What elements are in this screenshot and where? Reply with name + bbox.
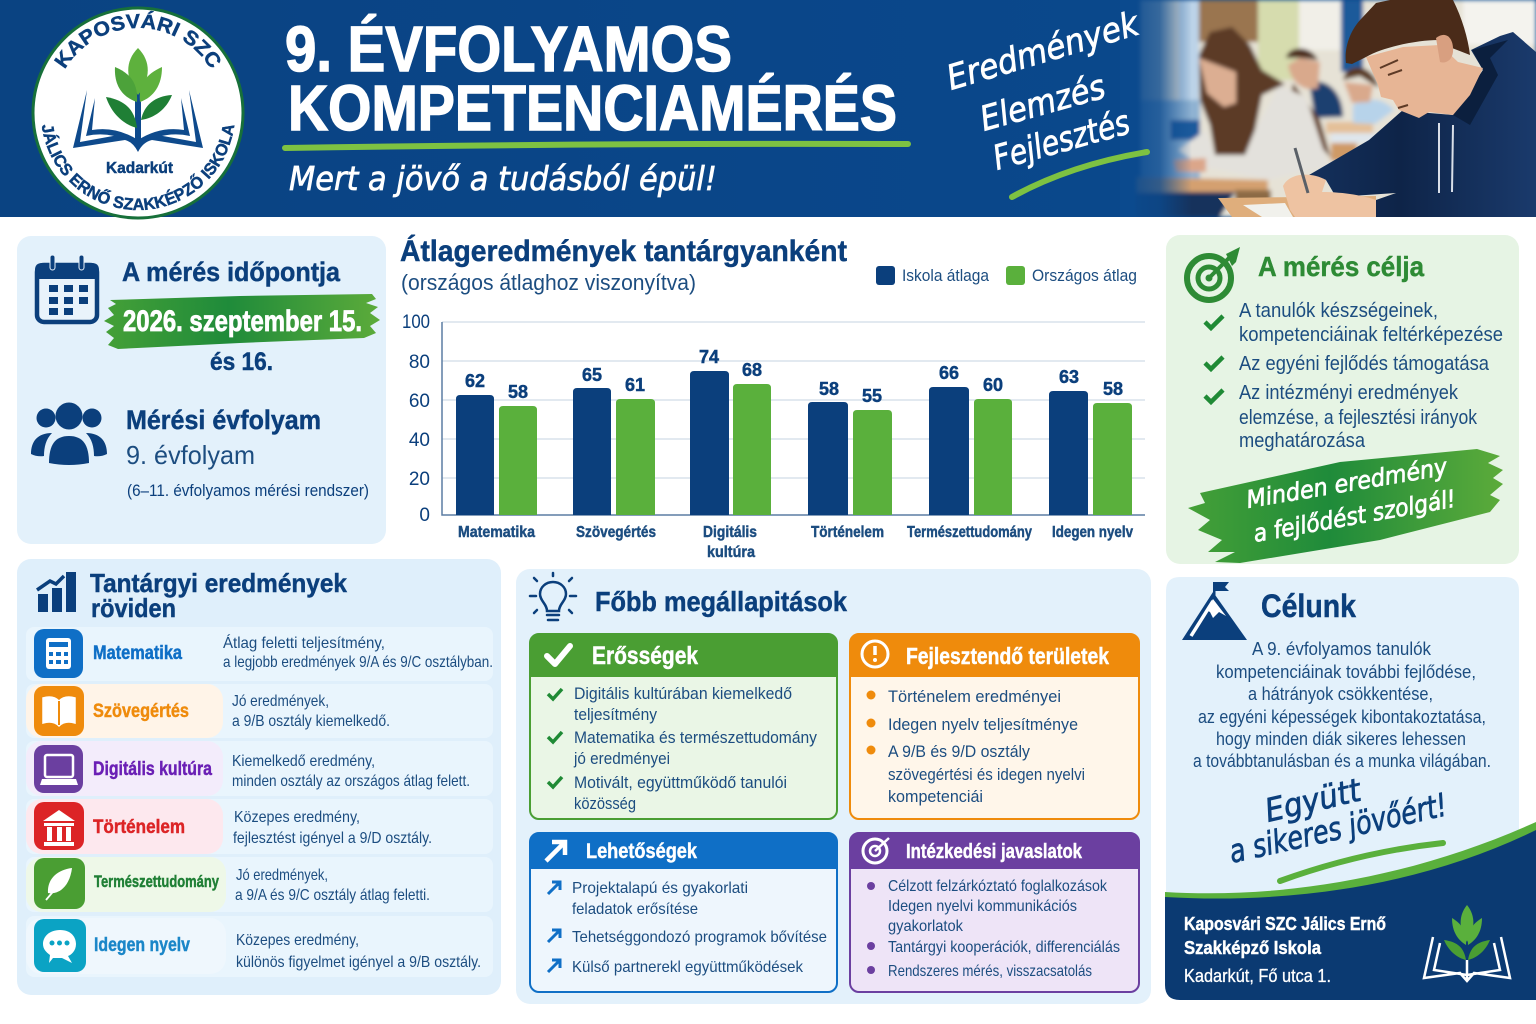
footer: school address: Szakképző Iskola: [1184, 938, 1322, 958]
row: Történelem: fejlesztést igényel a 9/D osztály.: [233, 830, 432, 847]
row: Digitális kultúra: Digitális kultúra: [93, 759, 212, 780]
panel: main findings: [516, 569, 1151, 1004]
row: Természettudomány: a 9/A és 9/C osztály átlag feletti.: [235, 887, 430, 904]
row: Matematika: a legjobb eredmények 9/A és 9/C osztályban.: [223, 654, 493, 671]
icon: bar chart growth: [37, 572, 76, 612]
slogan brush: Minden eredmény: [1244, 453, 1450, 514]
goal text: az egyéni képességek kibontakoztatása,: [1198, 707, 1486, 727]
photo: students writing a test: [1120, 0, 1536, 217]
card: areas to improve: [850, 634, 1139, 819]
card: recommended actions: Intézkedési javaslatok: [906, 841, 1083, 863]
boy hoodie: [1309, 32, 1536, 217]
card: areas to improve: szövegértési és idegen nyelvi: [888, 765, 1085, 784]
row: Szövegértés: [26, 684, 493, 738]
aim checklist: Az egyéni fejlődés támogatása: [1239, 353, 1490, 375]
bars: Matematika: [456, 371, 537, 515]
heading: our goal: Célunk: [1261, 588, 1356, 624]
row: Természettudomány: Természettudomány: [94, 872, 219, 891]
card: recommended actions: gyakorlatok: [888, 918, 964, 935]
title: [285, 13, 897, 144]
icon: mountain with flag: [1182, 582, 1247, 640]
footer logo: [1424, 905, 1510, 981]
row: Természettudomány: Jó eredmények,: [236, 867, 328, 884]
aim checklist: A tanulók készségeinek,: [1239, 300, 1438, 322]
goal text: A 9. évfolyamos tanulók: [1252, 639, 1432, 659]
chart legend: [876, 266, 1137, 285]
slogan: together: a sikeres jövőért!: [1226, 786, 1450, 871]
card: recommended actions: Tantárgyi kooperációk, differenciálás: [888, 939, 1120, 956]
x axis labels: Idegen nyelv: [1052, 524, 1133, 541]
bars: Idegen nyelv: [1049, 367, 1132, 515]
card: strengths: jó eredményei: [573, 749, 670, 768]
y axis labels: 40: [409, 430, 430, 451]
y axis labels: 20: [409, 469, 430, 490]
card: strengths: Matematika és természettudomány: [574, 728, 817, 747]
card: opportunities: [530, 833, 837, 992]
x axis labels: Történelem: [811, 524, 884, 541]
bars: Digitális kultúra: 74: [699, 347, 719, 367]
panel: measurement date and grade: [17, 236, 386, 544]
bars: Matematika: 58: [508, 382, 528, 402]
y axis labels: 100: [402, 312, 430, 333]
aim checklist: kompetenciáinak feltérképezése: [1239, 324, 1503, 346]
card: areas to improve: Fejlesztendő területek: [906, 643, 1109, 669]
date second day: és 16.: [210, 348, 273, 376]
bars: Szövegértés: [573, 365, 655, 515]
bar chart: averages by subject: [400, 234, 1145, 561]
row: Matematika: Átlag feletti teljesítmény,: [223, 633, 385, 652]
header keywords: Eredmények: [942, 4, 1145, 99]
header keywords: Fejlesztés: [989, 103, 1134, 179]
subtitle: Mert a jövő a tudásból épül!: [289, 159, 717, 198]
slogan: together: Együtt: [1261, 771, 1366, 830]
icon: target: [1187, 247, 1240, 300]
card: strengths: Erősségek: [592, 642, 698, 670]
row: Természettudomány: [26, 857, 493, 912]
goal text: kompetenciáinak további fejlődése,: [1216, 662, 1476, 682]
card: strengths: Motivált, együttműködő tanulói: [574, 773, 787, 792]
bars: Természettudomány: [929, 363, 1012, 515]
bars: Digitális kultúra: [690, 347, 771, 515]
row: Matematika: [26, 627, 493, 681]
x axis labels: kultúra: [707, 544, 755, 561]
y axis labels: 60: [409, 391, 430, 412]
row: Digitális kultúra: minden osztály az országos átlag felett.: [232, 773, 470, 790]
goal text: a hátrányok csökkentése,: [1248, 684, 1433, 704]
panel: aim of the measurement: [1166, 235, 1519, 564]
panel: subject results summary: [17, 559, 501, 995]
goal text: [1193, 639, 1491, 771]
icon: people: [31, 402, 107, 465]
bars: Digitális kultúra: 68: [742, 360, 762, 380]
bars: Természettudomány: 60: [983, 375, 1003, 395]
bars: Idegen nyelv: 63: [1059, 367, 1079, 387]
row: Idegen nyelv: Idegen nyelv: [94, 935, 190, 956]
chart heading: Átlageredmények tantárgyanként: [400, 234, 847, 268]
goal text: hogy minden diák sikeres lehessen: [1216, 729, 1466, 749]
boy hair: [1346, 0, 1470, 64]
card: recommended actions: [850, 833, 1139, 992]
card: strengths: Digitális kultúrában kiemelkedő: [574, 684, 792, 703]
aim checklist: elemzése, a fejlesztési irányok: [1239, 407, 1478, 429]
bars: Történelem: 58: [819, 379, 839, 399]
card: opportunities: Külső partnerekl együttműködések: [572, 959, 804, 976]
logo arc text: JÁLICS ERNŐ SZAKKÉPZŐ ISKOLA: [42, 124, 235, 210]
card: opportunities: Tehetséggondozó programok bővítése: [572, 929, 827, 946]
row: Idegen nyelv: Közepes eredmény,: [236, 932, 359, 949]
bars: Matematika: 62: [465, 371, 485, 391]
chart heading: (országos átlaghoz viszonyítva): [401, 270, 696, 295]
card: opportunities: Projektalapú és gyakorlati: [572, 880, 748, 897]
row: Matematika: Matematika: [93, 643, 182, 664]
panel: our goal: [1165, 577, 1536, 1000]
card: areas to improve: kompetenciái: [888, 787, 983, 806]
header keywords: Elemzés: [976, 67, 1110, 140]
row: Idegen nyelv: [26, 916, 493, 977]
card: opportunities: Lehetőségek: [586, 840, 697, 863]
grade text: [126, 405, 369, 500]
slogan brush: [1188, 449, 1503, 563]
chart heading: [400, 234, 847, 295]
heading: date: A mérés időpontja: [122, 257, 341, 287]
bars: Történelem: [808, 379, 892, 515]
icon: calendar: [35, 255, 99, 322]
chart legend: Országos átlag: [1032, 266, 1137, 285]
foreground desk: [1218, 196, 1376, 217]
card: recommended actions: Idegen nyelvi kommunikációs: [888, 898, 1077, 915]
bars: Idegen nyelv: 58: [1103, 379, 1123, 399]
date highlight: 2026. szeptember 15.: [123, 305, 362, 338]
card: recommended actions: Célzott felzárkóztató foglalkozások: [888, 878, 1108, 895]
heading: subject results: röviden: [91, 593, 176, 623]
aim checklist: [1205, 300, 1503, 452]
grade text: Mérési évfolyam: [126, 405, 321, 435]
row: Idegen nyelv: különös figyelmet igényel a 9/B osztály.: [236, 954, 481, 971]
row: Szövegértés: Szövegértés: [93, 701, 189, 722]
logo: school seal: [32, 6, 244, 220]
bars: Szövegértés: 65: [582, 365, 602, 385]
title: KOMPETENCIAMÉRÉS: [288, 72, 897, 144]
card: recommended actions: Rendszeres mérés, visszacsatolás: [888, 963, 1092, 980]
x axis labels: Szövegértés: [576, 524, 656, 541]
row: Történelem: [26, 799, 493, 854]
heading: aim: A mérés célja: [1258, 251, 1424, 282]
slogan brush: a fejlődést szolgál!: [1251, 485, 1458, 548]
icon: light bulb: [530, 573, 576, 620]
heading: findings: Főbb megállapitások: [595, 586, 847, 617]
goal text: a továbbtanulásban és a munka világában.: [1193, 751, 1491, 771]
footer: school address: Kadarkút, Fő utca 1.: [1184, 966, 1331, 986]
heading: subject results: [90, 568, 347, 623]
bars: Szövegértés: 61: [625, 375, 645, 395]
logo: school seal: Kadarkút: [106, 160, 174, 177]
row: Történelem: Történelem: [93, 817, 185, 838]
title underline: [285, 144, 908, 148]
header banner: [0, 0, 1536, 217]
grade text: (6–11. évfolyamos mérési rendszer): [127, 481, 369, 500]
card: areas to improve: Történelem eredményei: [888, 687, 1061, 706]
card: areas to improve: A 9/B és 9/D osztály: [888, 742, 1030, 761]
footer: school address: [1165, 822, 1536, 1000]
header keywords: [942, 4, 1147, 197]
logo arc text: KAPOSVÁRI SZC: [54, 10, 220, 69]
row: Szövegértés: Jó eredmények,: [232, 693, 329, 710]
x axis labels: Matematika: [458, 524, 535, 541]
bars: Természettudomány: 66: [939, 363, 959, 383]
aim checklist: Az intézményi eredmények: [1239, 382, 1459, 404]
card: strengths: [530, 634, 837, 819]
y axis labels: 0: [419, 505, 430, 526]
aim checklist: meghatározása: [1239, 430, 1366, 452]
row: Szövegértés: a 9/B osztály kiemelkedő.: [232, 713, 390, 730]
boy face: [1366, 45, 1483, 118]
card: strengths: közösség: [574, 794, 636, 813]
card: strengths: teljesítmény: [574, 705, 657, 724]
heading: subject results: Tantárgyi eredmények: [90, 568, 347, 598]
bars: Történelem: 55: [862, 386, 882, 406]
row: Digitális kultúra: Kiemelkedő eredmény,: [232, 753, 375, 770]
card: opportunities: feladatok erősítése: [572, 901, 698, 918]
date highlight: [104, 294, 380, 349]
y axis labels: 80: [409, 352, 430, 373]
logo arc text: [42, 10, 235, 210]
boy hands and pen: [1283, 175, 1376, 217]
x axis labels: [458, 524, 1133, 561]
x axis labels: Digitális: [703, 524, 757, 541]
grade text: 9. évfolyam: [126, 440, 255, 470]
chart legend: Iskola átlaga: [902, 266, 989, 285]
row: Történelem: Közepes eredmény,: [234, 809, 360, 826]
card: areas to improve: Idegen nyelv teljesítménye: [888, 715, 1078, 734]
x axis labels: Természettudomány: [907, 524, 1032, 541]
row: Digitális kultúra: [26, 741, 493, 796]
title: 9. ÉVFOLYAMOS: [285, 13, 732, 85]
y axis labels: [402, 312, 430, 526]
footer: school address: Kaposvári SZC Jálics Ernő: [1184, 914, 1386, 934]
